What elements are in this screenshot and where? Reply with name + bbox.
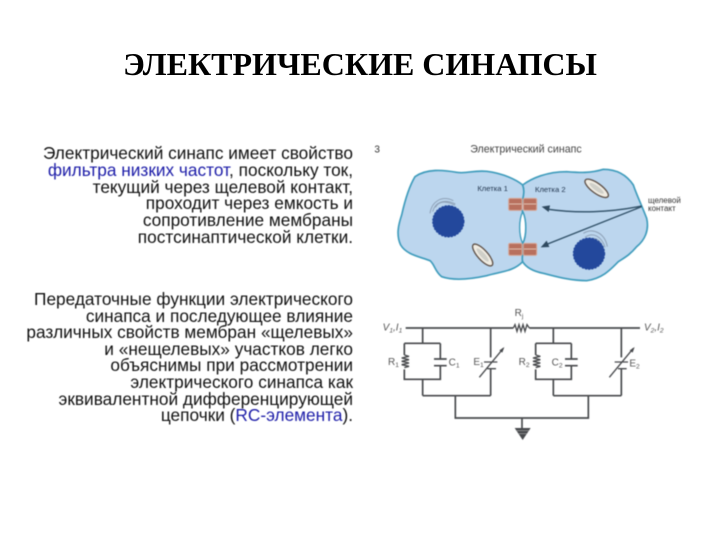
arrow to upper junction: [542, 205, 642, 212]
circuit labels: E: [629, 359, 636, 370]
branch R2 C2: [536, 328, 571, 396]
battery E1: [479, 348, 503, 377]
title: ЭЛЕКТРИЧЕСКИЕ СИНАПСЫ: [123, 46, 597, 82]
ground symbol: [515, 428, 531, 440]
label: gap junction: контакт: [648, 204, 676, 213]
label: gap junction: щелевой: [648, 196, 681, 205]
capacitor C1: [434, 359, 447, 366]
circuit labels: 1: [389, 328, 393, 335]
gap between membranes: [520, 212, 526, 243]
circuit labels: R: [519, 357, 526, 368]
text block: low-pass filter property: проходит через емкость и: [146, 193, 353, 213]
text block: transfer functions: [26, 289, 354, 426]
text block: low-pass filter property: Электрический синапс имеет свойство: [43, 143, 353, 163]
ground wires: [455, 396, 588, 428]
circuit labels: 1: [399, 328, 403, 335]
resistor Rj: [513, 325, 529, 331]
mitochondrion 1: [470, 241, 496, 269]
text block: transfer functions: эквивалентной дифференцирующей: [59, 389, 353, 409]
label: cell 2: Клетка 2: [535, 185, 566, 194]
diagram heading: Электрический синапс: [470, 144, 582, 156]
circuit labels: 2: [636, 364, 640, 371]
circuit labels: 2: [559, 363, 563, 370]
cell 2: [522, 169, 647, 281]
battery E2: [609, 348, 633, 377]
branch R1 C1: [404, 328, 440, 396]
capacitor C2: [565, 359, 578, 366]
text block: transfer functions: и «нещелевых» участков легко: [104, 339, 353, 359]
text block: low-pass filter property: постсинаптической клетки.: [138, 227, 353, 247]
nucleus 2 with reticulum: [573, 231, 607, 269]
circuit labels: R: [515, 308, 522, 319]
circuit labels: V: [383, 323, 389, 334]
circuit labels: R: [388, 357, 395, 368]
top wire: [406, 325, 640, 330]
circuit labels: 2: [526, 362, 530, 369]
circuit labels: ,I: [393, 323, 399, 334]
text block: low-pass filter property: фильтра низких частот, поскольку ток,: [48, 160, 353, 180]
text block: transfer functions: синапса и последующее влияние: [86, 306, 353, 326]
circuit labels: [383, 308, 664, 371]
text block: transfer functions: электрического синапса как: [130, 372, 353, 392]
text block: transfer functions: цепочки (RC-элемента).: [161, 405, 353, 425]
circuit labels: V: [644, 323, 651, 334]
gap junction upper: [509, 198, 537, 210]
circuit labels: 2: [650, 328, 655, 335]
circuit labels: ,I: [654, 323, 660, 334]
text block: low-pass filter property: текущий через щелевой контакт,: [93, 177, 353, 197]
circuit labels: 2: [659, 328, 664, 335]
text block: low-pass filter property: сопротивление мембраны: [143, 210, 353, 230]
figure number: 3: [374, 144, 380, 155]
circuit labels: 1: [456, 363, 460, 370]
circuit labels: E: [473, 357, 480, 368]
branch E2: [553, 328, 621, 396]
nucleus 1 with reticulum: [430, 199, 464, 237]
label: cell 1: Клетка 1: [477, 184, 508, 193]
circuit diagram: [383, 308, 664, 440]
text block: transfer functions: объяснимы при рассмотрении: [110, 355, 353, 375]
mitochondrion 2: [582, 176, 611, 201]
text block: low-pass filter property: [43, 143, 353, 247]
arrow to lower junction: [541, 207, 642, 247]
resistor R1: [402, 355, 409, 368]
circuit labels: 1: [480, 362, 484, 369]
text block: transfer functions: Передаточные функции электрического: [34, 289, 353, 309]
circuit labels: C: [449, 358, 456, 369]
cell 1: [398, 170, 524, 279]
branch E1: [423, 328, 491, 396]
text block: transfer functions: различных свойств мембран «щелевых»: [26, 322, 353, 342]
circuit labels: 1: [395, 362, 399, 369]
circuit labels: C: [552, 358, 559, 369]
resistor R2: [533, 355, 540, 368]
label: gap junction: [648, 196, 681, 213]
circuit labels: j: [521, 313, 524, 320]
gap junction lower: [509, 243, 537, 255]
